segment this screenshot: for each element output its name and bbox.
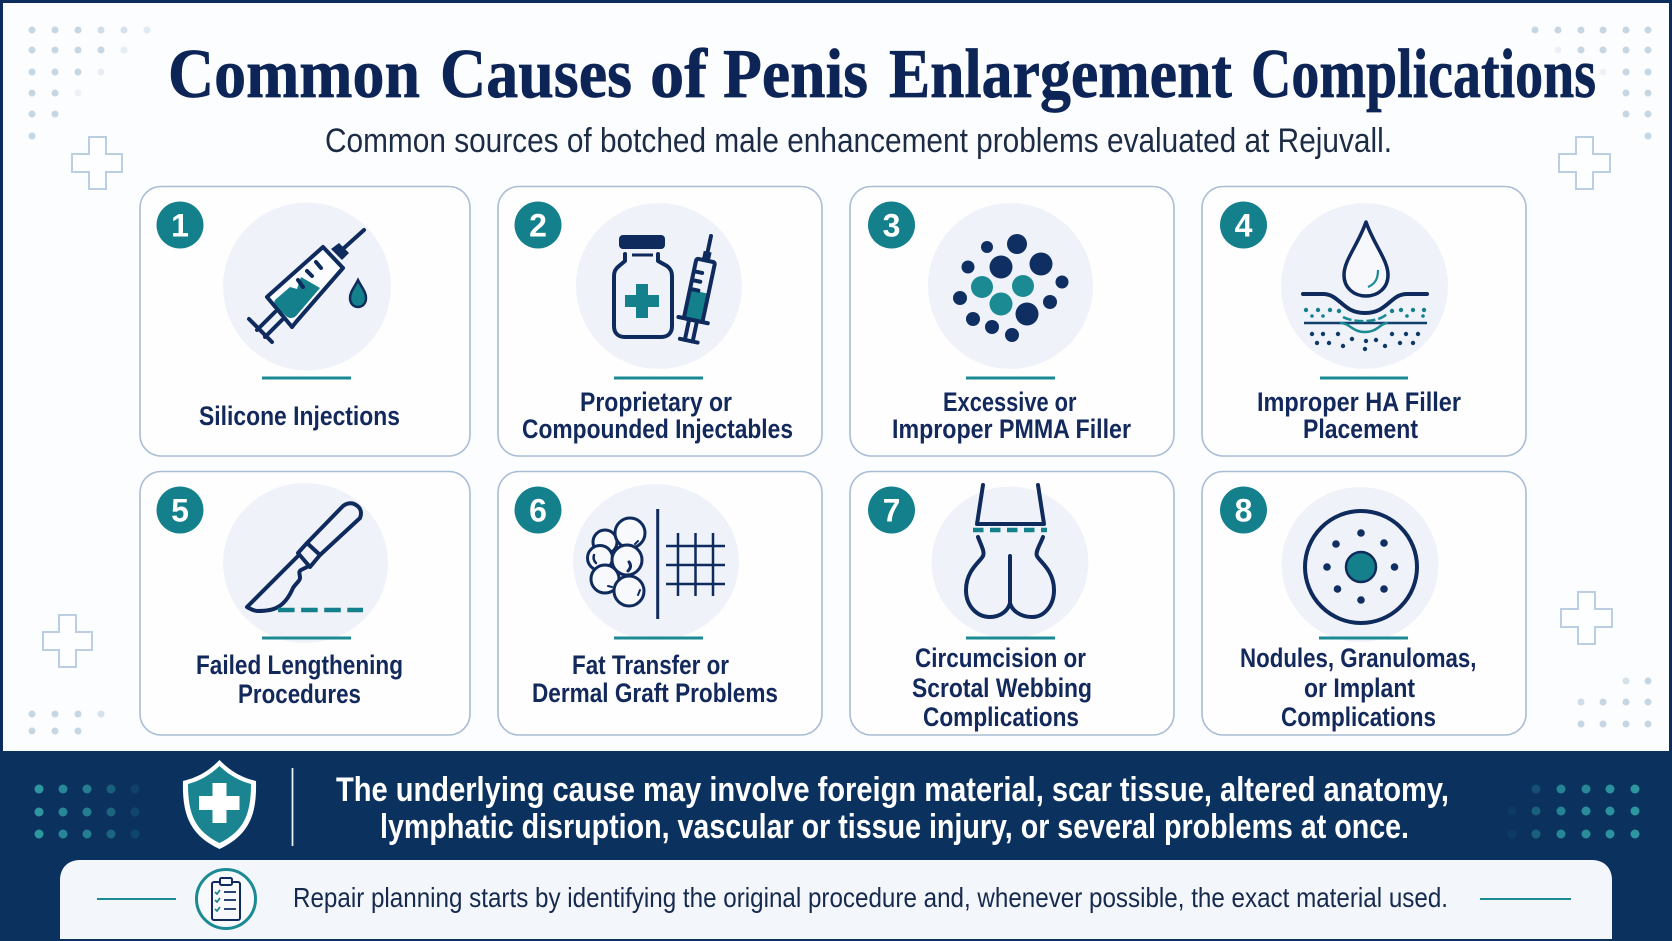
title: Common [168,36,420,113]
icon: vial and syringe [614,233,726,344]
number badge 5: 5 [171,492,189,528]
divider [614,376,703,380]
label [196,650,403,709]
panel: card 6 fat transfer [498,472,822,735]
decorative dots: top left [28,26,150,140]
label: Compounded Injectables [522,414,793,444]
icon backdrop 4 [1281,203,1448,369]
icon: fat cells and dermal mesh [588,509,725,619]
decorative dots: lower right [1578,678,1652,728]
number badge 5 [156,486,204,534]
label: Complications [923,702,1079,732]
number badge 4: 4 [1235,208,1253,244]
decorative dots: lower left [28,710,104,734]
divider [262,376,351,380]
title: Complications [1251,36,1596,113]
label: Proprietary or [580,387,732,417]
icon: droplet over skin layers [1303,222,1427,351]
label [532,650,778,708]
title: Enlargement [889,36,1232,113]
label: Failed Lengthening [196,650,403,680]
icon: medical shield [183,760,256,849]
icon: clipboard checklist [196,870,256,928]
label: Silicone Injections [199,401,400,431]
panel: card 5 lengthening procedures [140,472,470,735]
icon: nodule cross-section [1305,511,1417,623]
number badge 6 [514,486,562,534]
banner message: lymphatic disruption, vascular or tissue injury, or several problems at once. [380,808,1409,846]
note text: Repair planning starts by identifying the original procedure and, whenever possible, the exact material used. [293,882,1448,913]
label: Placement [1303,414,1418,444]
number badge 3 [868,202,915,248]
label: Excessive or [943,387,1077,417]
number badge 7 [868,486,915,534]
label [892,387,1131,444]
label [912,643,1092,732]
title [168,36,1596,113]
label [1240,643,1476,732]
plus outline: lower left [43,615,92,667]
title: Causes [440,36,632,113]
banner message: The underlying cause may involve foreign material, scar tissue, altered anatomy, [336,771,1449,809]
label: Circumcision or [915,643,1086,673]
panel: card 8 nodules and granulomas [1202,472,1526,735]
icon backdrop 2 [576,203,742,369]
number badge 1 [156,202,204,248]
label: Improper PMMA Filler [892,414,1131,444]
decorative dots: banner right [1508,784,1640,838]
icon: scalpel with incision line [247,503,363,611]
title: of [650,36,708,113]
panel: card 7 circumcision or scrotal webbing [850,472,1174,735]
label: Complications [1281,702,1436,732]
icon backdrop 1 [223,202,391,370]
number badge 2: 2 [529,208,547,244]
panel: card 4 HA filler [1202,186,1526,456]
decorative dots: top right [1532,26,1652,140]
subtitle: Common sources of botched male enhancement problems evaluated at Rejuvall. [325,122,1392,160]
label: Scrotal Webbing [912,673,1092,703]
divider [966,636,1055,640]
divider [262,636,351,640]
plus outline: top left [72,137,122,189]
icon: syringe with droplet [249,230,366,342]
icon backdrop 5 [223,483,388,643]
icon backdrop 3 [928,203,1093,369]
divider [1319,636,1408,640]
label [1257,387,1461,444]
panel: bottom banner [0,751,1672,941]
icon backdrop 6 [573,484,739,640]
panel: card 1 silicone injections [140,186,470,456]
label: or Implant [1304,673,1415,703]
plus outline: top right [1559,137,1610,189]
divider line [292,768,294,846]
title: Penis [723,36,868,113]
number badge 3: 3 [883,208,900,244]
label: Improper HA Filler [1257,387,1461,417]
divider [966,376,1055,380]
number badge 7: 7 [883,492,900,528]
panel: card 2 proprietary injectables [498,186,822,456]
number badge 4 [1220,202,1267,248]
plus outline: lower right [1561,592,1612,644]
number badge 1: 1 [171,208,189,244]
divider [614,636,703,640]
number badge 6: 6 [529,492,547,528]
decorative dots: banner left [34,784,140,838]
label [522,387,793,444]
number badge 2 [514,202,562,248]
icon: filler particles [953,234,1068,342]
icon backdrop 8 [1282,487,1438,642]
number badge 8 [1220,486,1267,534]
label: Fat Transfer or [572,650,729,680]
icon: anatomy line drawing [966,485,1054,617]
divider [1320,376,1408,380]
label: Procedures [238,679,361,709]
number badge 8: 8 [1235,492,1252,528]
panel: repair planning note [60,860,1612,939]
panel: card 3 PMMA filler [850,186,1174,456]
icon backdrop 7 [932,486,1088,638]
label: Dermal Graft Problems [532,678,778,708]
label: Nodules, Granulomas, [1240,643,1476,673]
banner message [336,771,1449,846]
